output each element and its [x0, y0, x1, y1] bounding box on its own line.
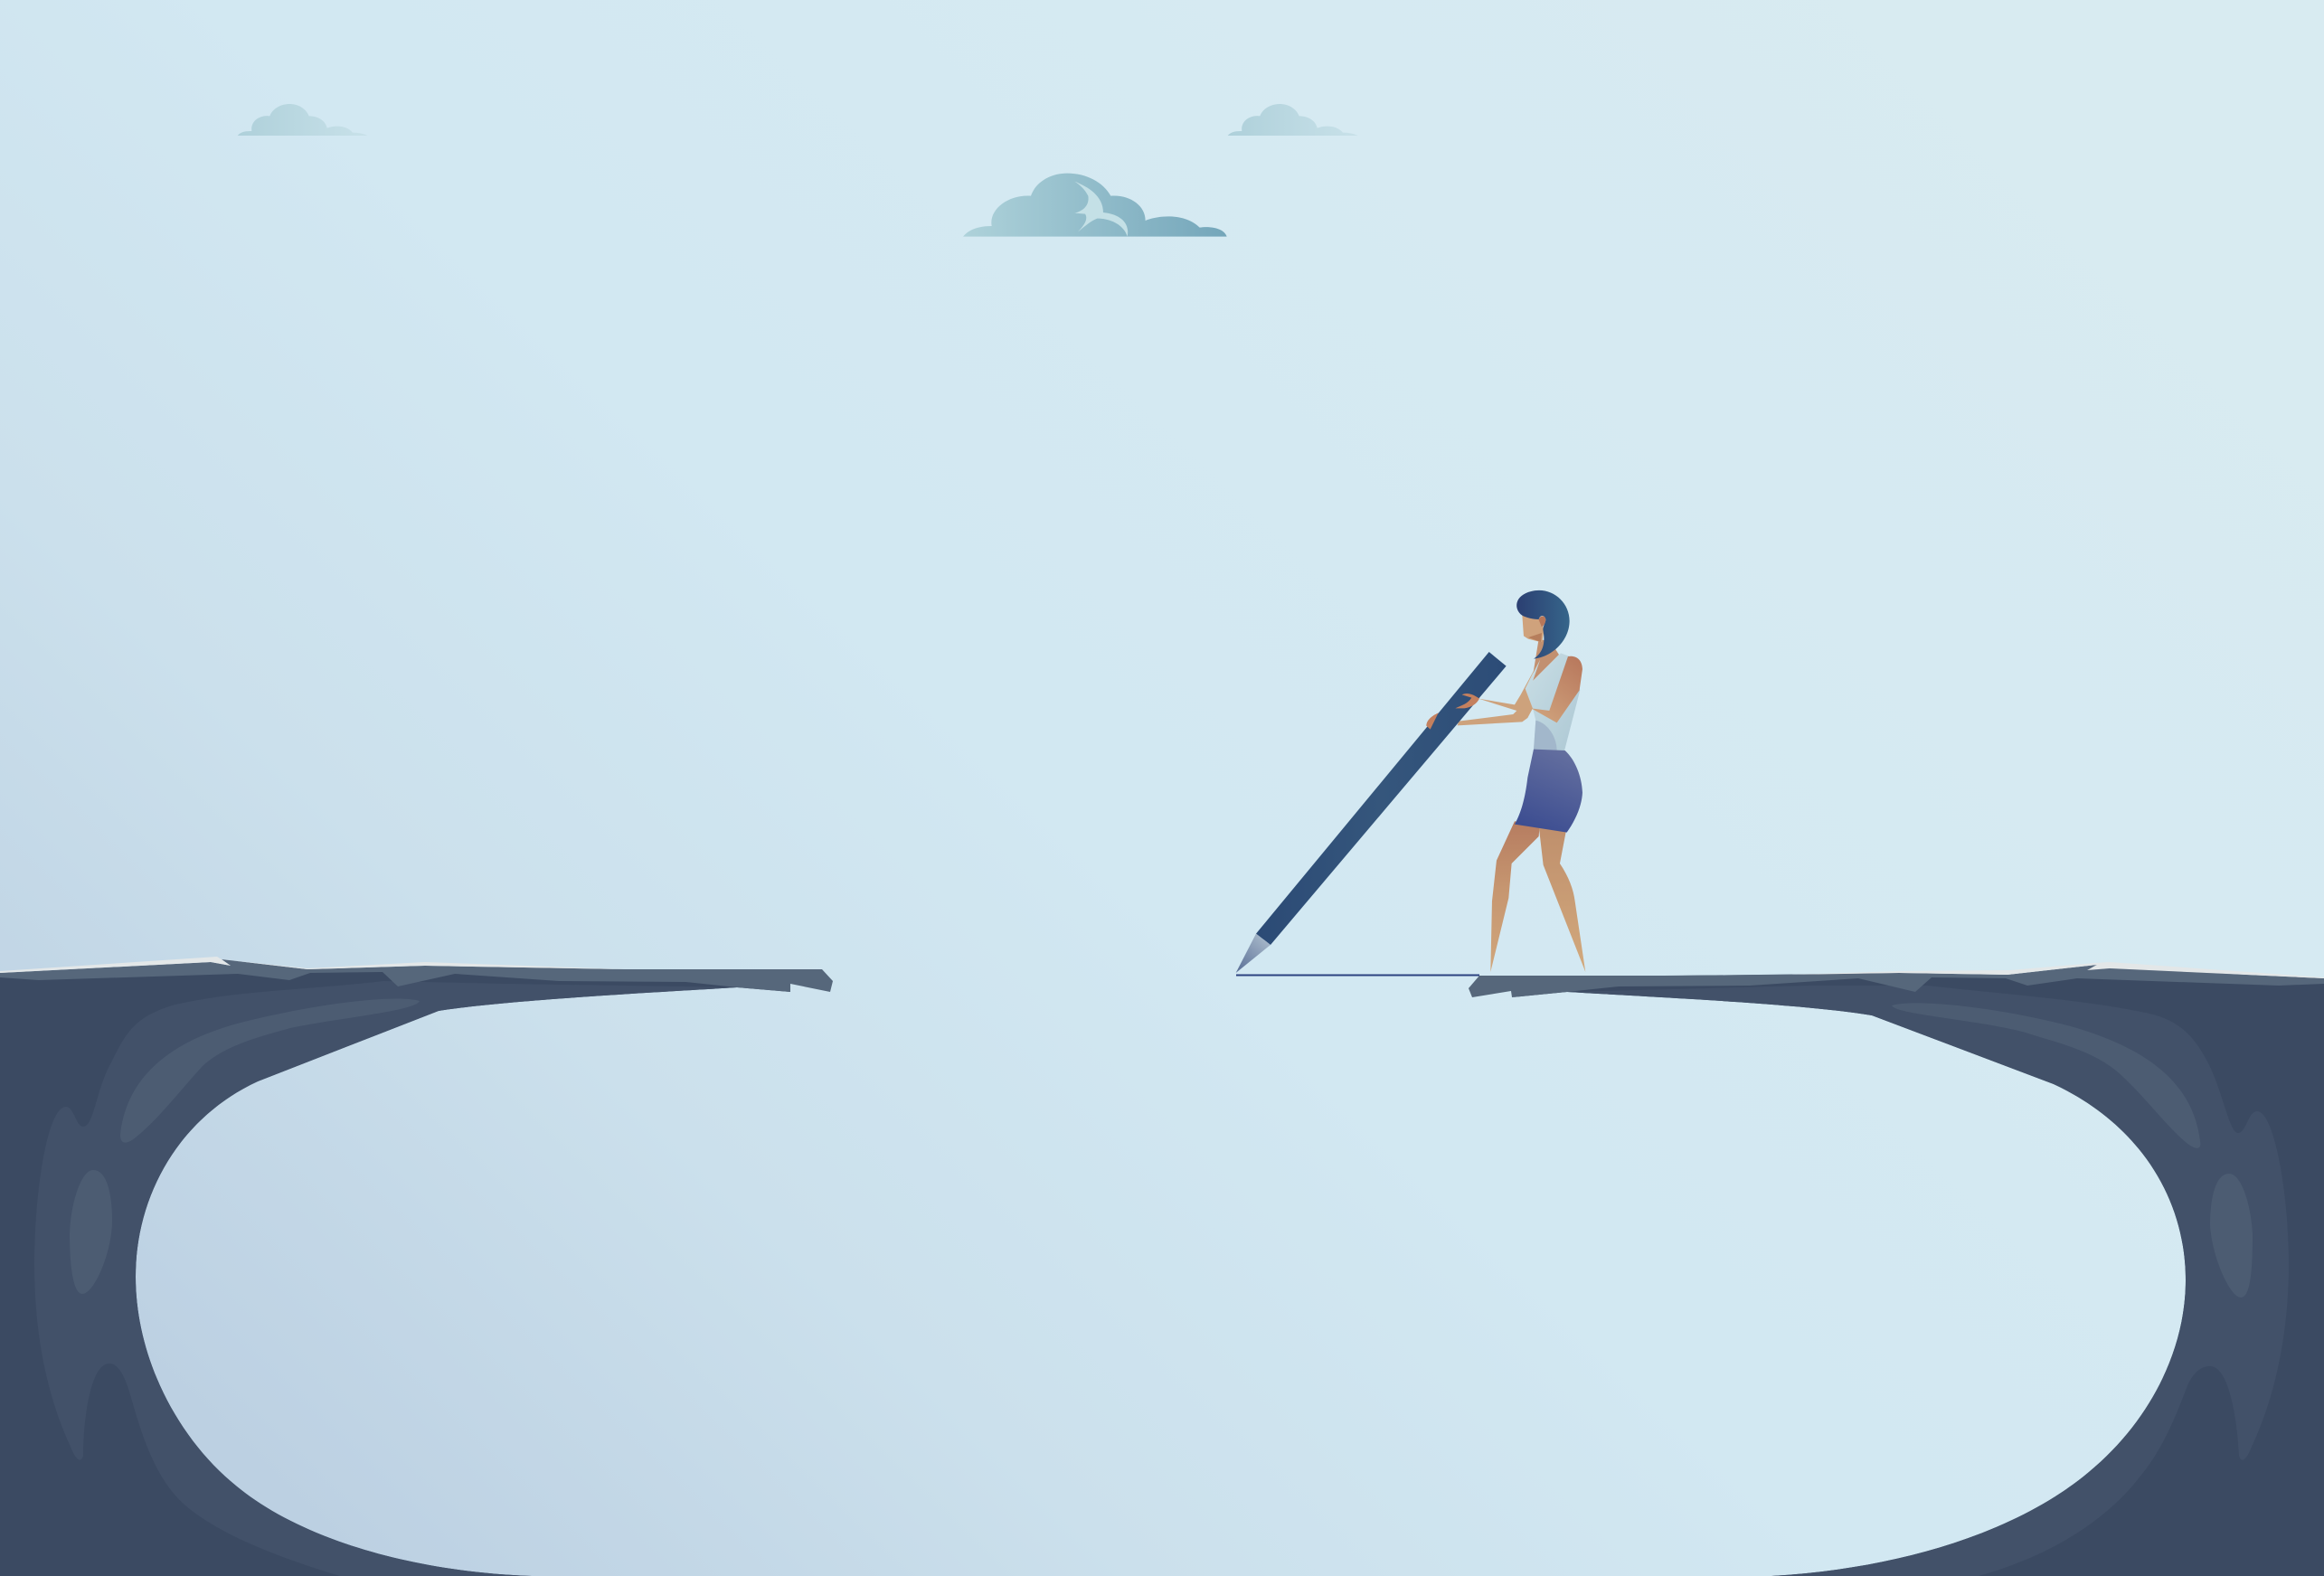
- pencil tip: [1236, 934, 1271, 973]
- jaw shadow: [1528, 633, 1542, 642]
- small cloud left: [238, 104, 368, 136]
- right cliff: [1469, 962, 2324, 1576]
- neck: [1532, 639, 1559, 682]
- right ledge slab: [1469, 965, 2324, 997]
- right cliff highlight oval: [2210, 1174, 2253, 1298]
- blouse lower shade: [1534, 721, 1557, 750]
- left ledge slab: [0, 959, 833, 992]
- face: [1522, 615, 1544, 642]
- left ledge lit edge: [0, 957, 625, 973]
- upper arm: [1531, 656, 1582, 722]
- drawn bridge line: [1236, 975, 1479, 977]
- right cliff base rock: [1512, 966, 2324, 1576]
- near arm and forearms: [1458, 658, 1540, 725]
- ear: [1539, 616, 1545, 627]
- left cliff highlight oval: [70, 1170, 112, 1294]
- right cliff mid layer: [1567, 986, 2289, 1576]
- right ledge lit edge: [1790, 962, 2324, 978]
- left cliff highlight blob upper: [120, 999, 420, 1143]
- right cliff highlight blob upper: [1892, 1003, 2200, 1148]
- left cliff base rock: [0, 964, 790, 1576]
- small cloud right: [1228, 104, 1358, 136]
- blouse: [1526, 653, 1580, 751]
- woman figure with pencil: [1236, 590, 1585, 973]
- hair: [1516, 590, 1570, 659]
- skirt: [1515, 750, 1582, 833]
- large cloud with swoosh: [963, 174, 1227, 237]
- hand on pencil: [1455, 694, 1479, 708]
- hand behind pencil: [1426, 713, 1439, 730]
- pencil body: [1256, 652, 1507, 945]
- left cliff: [0, 957, 833, 1576]
- left cliff mid layer: [34, 981, 737, 1576]
- back leg: [1490, 821, 1540, 972]
- front leg: [1539, 826, 1585, 972]
